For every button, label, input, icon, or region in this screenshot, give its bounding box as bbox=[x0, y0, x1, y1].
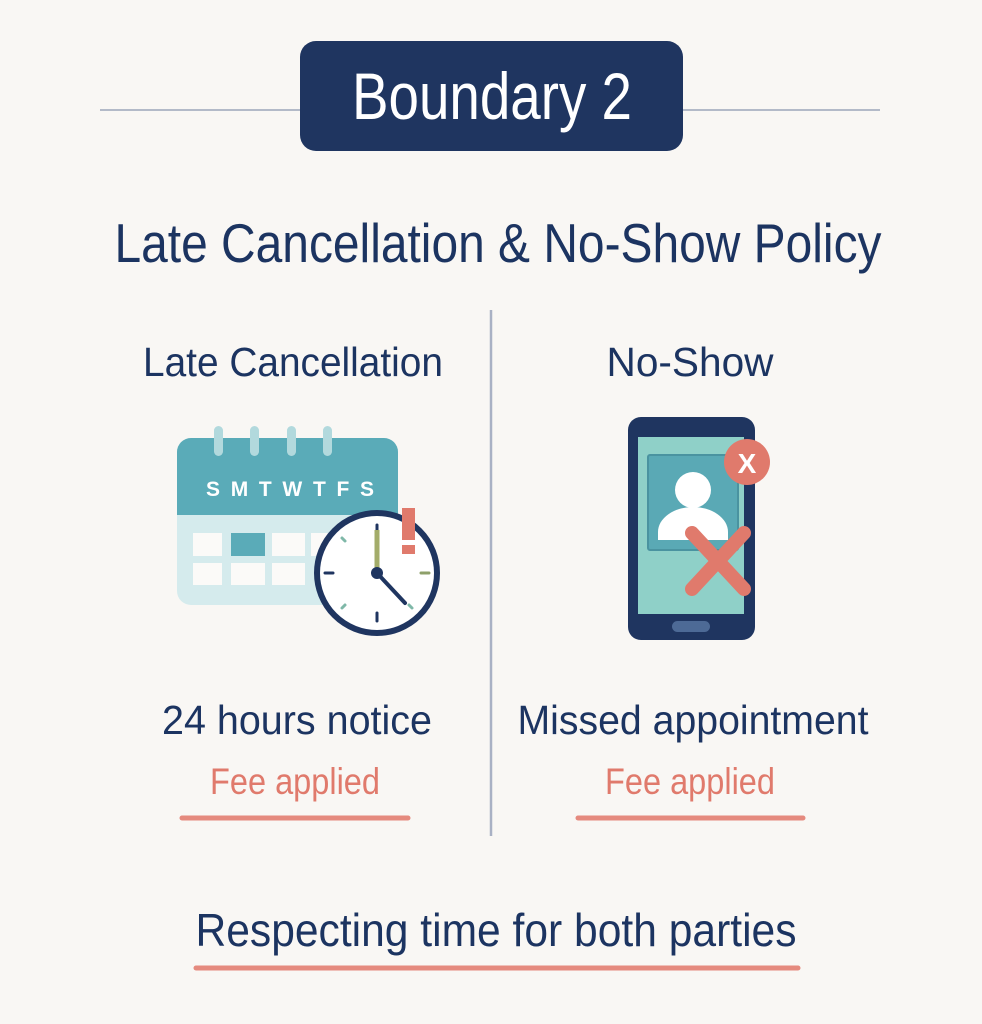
fee applied: Fee applied bbox=[210, 761, 380, 802]
divider bbox=[490, 310, 492, 836]
icon: phone with missed call bbox=[628, 417, 770, 640]
title badge: Boundary 2 bbox=[352, 59, 632, 133]
icon: calendar with clock bbox=[177, 426, 437, 633]
heading: late cancellation: Late Cancellation bbox=[143, 339, 443, 385]
fee applied: Fee applied bbox=[605, 761, 775, 802]
subtitle: Late Cancellation & No-Show Policy bbox=[114, 212, 882, 274]
icon: calendar with clock: SMTWTFS bbox=[206, 478, 374, 501]
icon: phone with missed call: X bbox=[738, 448, 757, 479]
text: 24 hours notice: 24 hours notice bbox=[162, 697, 432, 743]
title badge bbox=[300, 41, 683, 151]
footer message: Respecting time for both parties bbox=[196, 904, 796, 956]
heading: no-show: No-Show bbox=[606, 339, 774, 385]
panel: no-show bbox=[518, 339, 869, 818]
text: missed appointment: Missed appointment bbox=[518, 697, 869, 743]
panel: late cancellation bbox=[143, 339, 443, 818]
